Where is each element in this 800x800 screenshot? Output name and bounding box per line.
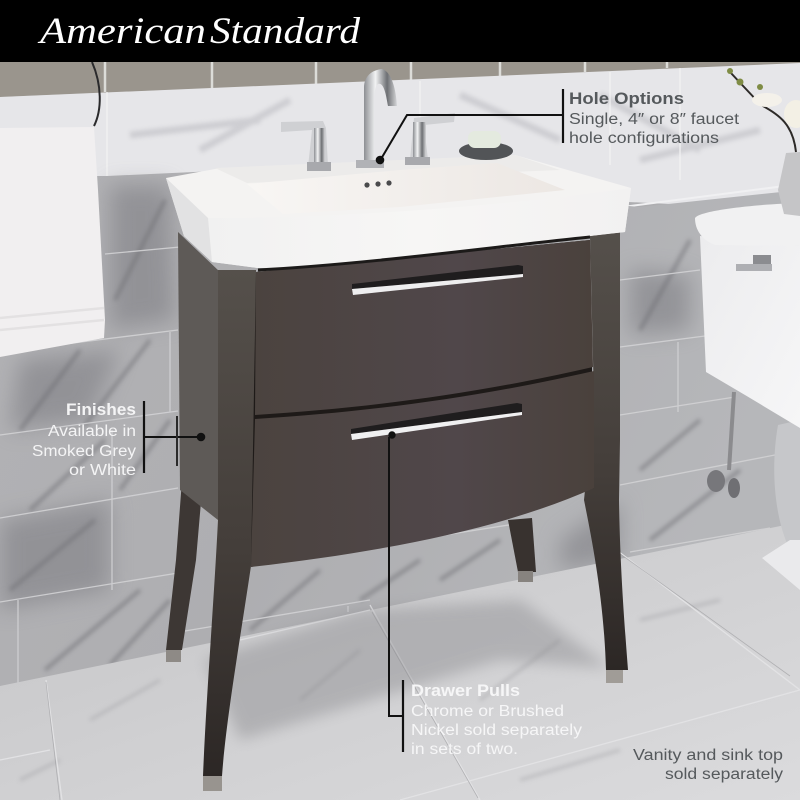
note: sold separately xyxy=(633,747,783,783)
toilet xyxy=(695,203,800,590)
floor shadow under vanity xyxy=(205,600,610,740)
callout text xyxy=(569,89,740,147)
logo xyxy=(37,11,361,52)
callout text: Hole Options xyxy=(569,89,684,108)
spout xyxy=(356,69,397,168)
note: sold separately: sold separately xyxy=(665,766,783,783)
callout text: hole configurations xyxy=(569,130,719,147)
callout text: Finishes xyxy=(66,400,136,419)
vase and flower xyxy=(727,68,800,216)
callout text: Chrome or Brushed xyxy=(411,703,564,720)
left end face xyxy=(166,178,212,262)
white marble backsplash xyxy=(0,63,800,208)
callout text xyxy=(32,400,136,479)
left handle xyxy=(281,121,331,171)
back right foot xyxy=(518,571,533,582)
callout text: or White xyxy=(69,462,136,479)
callout text: Available in xyxy=(48,423,136,440)
leader line xyxy=(389,432,403,752)
vanity cabinet xyxy=(166,232,628,791)
header bar xyxy=(0,0,800,62)
supply pipe xyxy=(729,392,734,470)
lower drawer xyxy=(251,371,594,567)
floor xyxy=(0,522,800,800)
valve xyxy=(707,470,740,498)
drawer backing xyxy=(251,240,594,567)
marble veins xyxy=(0,200,740,670)
side panel xyxy=(178,232,220,520)
callout text: Single, 4″ or 8″ faucet xyxy=(569,111,740,128)
flush handle xyxy=(736,255,772,271)
tank lid xyxy=(695,203,800,246)
left foot xyxy=(203,776,222,791)
logo: American xyxy=(37,11,206,52)
tank body xyxy=(700,236,800,428)
right foot xyxy=(606,670,623,683)
faucet holes xyxy=(364,180,392,188)
upper pull xyxy=(352,265,523,295)
callout: finishes xyxy=(32,400,205,479)
note: sold separately: Vanity and sink top xyxy=(633,747,783,764)
towel xyxy=(0,127,105,357)
front left leg xyxy=(203,270,256,776)
back left foot xyxy=(166,650,181,662)
right handle xyxy=(405,113,455,165)
dark marble patches xyxy=(0,185,690,610)
leader line xyxy=(144,401,205,473)
glass tile band xyxy=(0,60,800,97)
faucet xyxy=(281,69,455,171)
callout text: in sets of two. xyxy=(411,741,518,758)
front right leg xyxy=(584,232,628,670)
callout text: Smoked Grey xyxy=(32,443,136,460)
front face xyxy=(208,188,631,268)
callout text xyxy=(411,681,582,758)
basin xyxy=(247,163,565,214)
callout: hole options xyxy=(376,89,740,164)
deck xyxy=(215,155,560,183)
upper drawer xyxy=(255,240,593,415)
back left leg xyxy=(166,480,202,650)
callout text: Drawer Pulls xyxy=(411,681,520,700)
callout: drawer pulls xyxy=(389,432,582,758)
back right leg xyxy=(508,518,536,572)
soap dish xyxy=(459,131,513,160)
logo: Standard xyxy=(210,11,361,52)
bowl xyxy=(774,420,800,560)
cabinet shadow line xyxy=(258,237,590,270)
lower pull xyxy=(351,403,522,440)
callout text: Nickel sold separately xyxy=(411,722,582,739)
sink top xyxy=(166,155,631,270)
towel ring xyxy=(92,62,100,126)
grey marble lower wall xyxy=(0,171,800,692)
leader line xyxy=(376,89,563,164)
